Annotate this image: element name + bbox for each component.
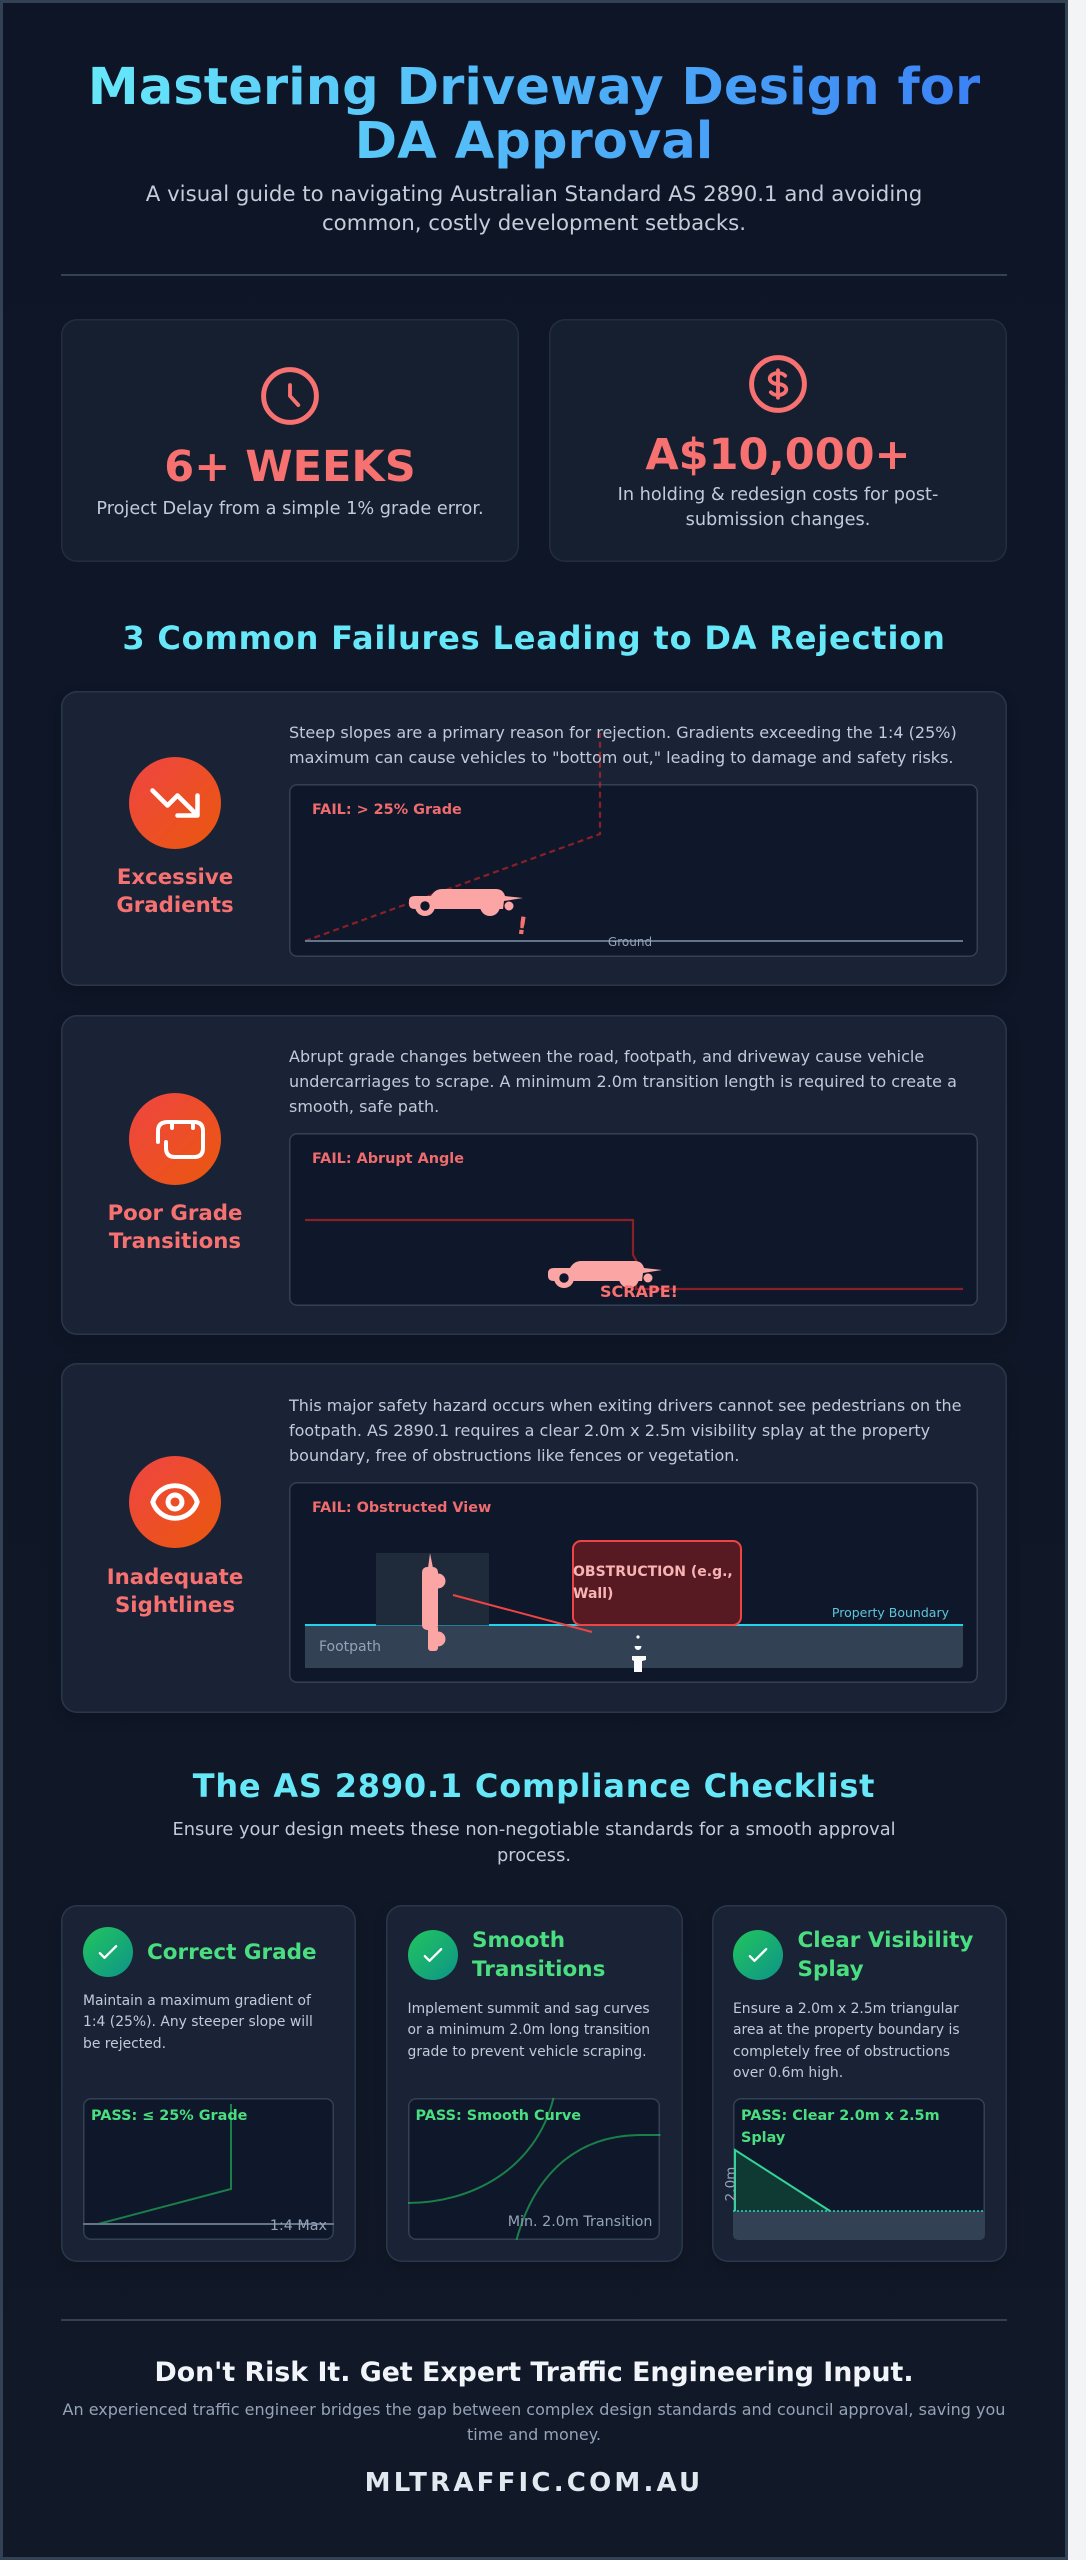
icon: clock xyxy=(261,367,319,425)
failure title: Gradients xyxy=(116,893,234,918)
failure description: Steep slopes are a primary reason for rejection. Gradients exceeding the 1:4 (25%) xyxy=(289,722,957,742)
failure description xyxy=(288,1396,962,1464)
stat value: A$10,000+ xyxy=(645,430,911,480)
checklist title: Splay xyxy=(798,1956,864,1982)
icon: check xyxy=(408,1930,458,1980)
diagram label: FAIL: Abrupt Angle xyxy=(312,1151,464,1167)
failure title: Poor Grade xyxy=(108,1200,242,1226)
title: Mastering Driveway Design for xyxy=(88,57,980,117)
drawing: Min. 2.0m Transition xyxy=(507,2214,652,2230)
website: MLTRAFFIC.COM.AU xyxy=(365,2468,703,2498)
panel: poor grade transitions xyxy=(61,1015,1007,1335)
failure description: Abrupt grade changes between the road, footpath, and driveway cause vehicle xyxy=(289,1046,924,1066)
diagram drawing: Ground xyxy=(608,935,652,949)
failure description: footpath. AS 2890.1 requires a clear 2.0m x 2.5m visibility splay at the property xyxy=(289,1420,930,1440)
checklist text: be rejected. xyxy=(83,2036,166,2052)
panel: inadequate sightlines xyxy=(61,1363,1007,1713)
failure title xyxy=(108,1200,242,1254)
stat caption xyxy=(618,485,938,530)
diagram label: PASS: ≤ 25% Grade xyxy=(91,2108,247,2124)
heading: compliance checklist: The AS 2890.1 Compliance Checklist xyxy=(193,1767,875,1805)
failure title xyxy=(116,864,234,918)
checklist text: 1:4 (25%). Any steeper slope will xyxy=(83,2014,313,2030)
checklist title: Clear Visibility xyxy=(798,1928,973,1953)
checklist title: Transitions xyxy=(472,1956,605,1982)
checklist text: or a minimum 2.0m long transition xyxy=(408,2022,650,2038)
icon: check xyxy=(733,1930,783,1980)
failure title xyxy=(107,1564,243,1618)
failure description: maximum can cause vehicles to "bottom out," leading to damage and safety risks. xyxy=(289,748,953,766)
drawing xyxy=(83,2104,334,2234)
diagram: pass curve xyxy=(408,2098,660,2240)
diagram: steep grade failure xyxy=(289,784,978,957)
diagram label: FAIL: > 25% Grade xyxy=(312,802,462,818)
diagram: pass splay xyxy=(733,2098,985,2240)
title: DA Approval xyxy=(355,111,713,171)
subtitle xyxy=(146,182,922,236)
drawing xyxy=(723,2148,985,2240)
diagram label: FAIL: Obstructed View xyxy=(312,1500,491,1516)
subtitle: A visual guide to navigating Australian Standard AS 2890.1 and avoiding xyxy=(146,182,922,207)
icon: eye xyxy=(129,1456,221,1548)
checklist text: completely free of obstructions xyxy=(733,2044,950,2060)
failure title: Excessive xyxy=(117,864,233,890)
checklist title xyxy=(798,1928,973,1982)
checklist subtitle: process. xyxy=(497,1845,571,1866)
stat caption: Project Delay from a simple 1% grade error. xyxy=(96,499,484,519)
diagram drawing xyxy=(304,733,963,949)
icon: transition xyxy=(129,1093,221,1185)
failure title: Sightlines xyxy=(115,1593,235,1618)
failure description: boundary, free of obstructions like fences or vegetation. xyxy=(289,1446,739,1464)
checklist text xyxy=(408,2000,650,2060)
call to action text: time and money. xyxy=(467,2424,601,2444)
stat value: 6+ WEEKS xyxy=(164,442,416,492)
drawing: 1:4 Max xyxy=(270,2218,327,2234)
checklist text xyxy=(83,1992,313,2052)
diagram drawing: Wall) xyxy=(573,1586,613,1602)
call to action text: An experienced traffic engineer bridges the gap between complex design standards and council approval, saving you xyxy=(63,2400,1005,2418)
diagram drawing xyxy=(305,1218,963,1301)
diagram drawing xyxy=(305,1540,963,1672)
checklist text xyxy=(733,2000,960,2081)
diagram: obstructed view failure xyxy=(289,1482,978,1683)
diagram label: Splay xyxy=(741,2130,785,2146)
failure title: Transitions xyxy=(109,1229,241,1254)
diagram drawing: ! xyxy=(515,911,529,941)
title xyxy=(34,61,1034,169)
failure description: smooth, safe path. xyxy=(289,1096,439,1116)
stat caption: In holding & redesign costs for post- xyxy=(618,485,938,505)
failure description xyxy=(289,722,957,766)
panel: stat project delay xyxy=(61,319,519,562)
stat caption: submission changes. xyxy=(686,510,870,530)
diagram: abrupt angle failure xyxy=(289,1133,978,1306)
diagram: pass grade xyxy=(83,2098,334,2240)
checklist text: Maintain a maximum gradient of xyxy=(83,1992,311,2008)
drawing xyxy=(408,2098,660,2240)
failure description xyxy=(289,1046,957,1116)
icon: dollar xyxy=(749,355,807,413)
checklist text: over 0.6m high. xyxy=(733,2065,843,2081)
icon: trending down xyxy=(129,757,221,849)
diagram drawing: Property Boundary xyxy=(832,1605,950,1620)
call to action heading: Don't Risk It. Get Expert Traffic Engineering Input. xyxy=(154,2357,914,2388)
checklist subtitle xyxy=(172,1819,896,1866)
heading: common failures: 3 Common Failures Leading to DA Rejection xyxy=(122,619,946,657)
panel: clear visibility splay xyxy=(712,1905,1007,2262)
diagram drawing: SCRAPE! xyxy=(600,1282,678,1301)
checklist text: area at the property boundary is xyxy=(733,2022,960,2038)
panel: smooth transitions xyxy=(386,1905,682,2262)
panel: stat redesign cost xyxy=(549,319,1007,562)
icon: check xyxy=(83,1927,133,1977)
checklist subtitle: Ensure your design meets these non-negotiable standards for a smooth approval xyxy=(172,1819,896,1840)
checklist text: grade to prevent vehicle scraping. xyxy=(408,2044,647,2060)
subtitle: common, costly development setbacks. xyxy=(322,211,746,236)
panel: excessive gradients xyxy=(61,691,1007,986)
failure description: undercarriages to scrape. A minimum 2.0m transition length is required to create a xyxy=(289,1072,957,1090)
diagram drawing: Footpath xyxy=(319,1639,381,1655)
checklist title xyxy=(472,1928,605,1982)
failure description: This major safety hazard occurs when exiting drivers cannot see pedestrians on the xyxy=(289,1396,962,1414)
checklist title: Smooth xyxy=(472,1928,565,1953)
diagram drawing: OBSTRUCTION (e.g., xyxy=(573,1564,733,1580)
diagram label: PASS: Clear 2.0m x 2.5m xyxy=(741,2108,940,2124)
failure title: Inadequate xyxy=(107,1564,243,1590)
diagram label: PASS: Smooth Curve xyxy=(416,2108,581,2124)
panel: correct grade xyxy=(61,1905,356,2262)
call to action text xyxy=(62,2400,1005,2444)
checklist title: Correct Grade xyxy=(147,1940,317,1964)
diagram label xyxy=(741,2108,940,2146)
panel: clear visibility splay: 2.0m xyxy=(723,2167,739,2201)
checklist text: Implement summit and sag curves xyxy=(408,2000,650,2016)
checklist text: Ensure a 2.0m x 2.5m triangular xyxy=(733,2000,959,2016)
